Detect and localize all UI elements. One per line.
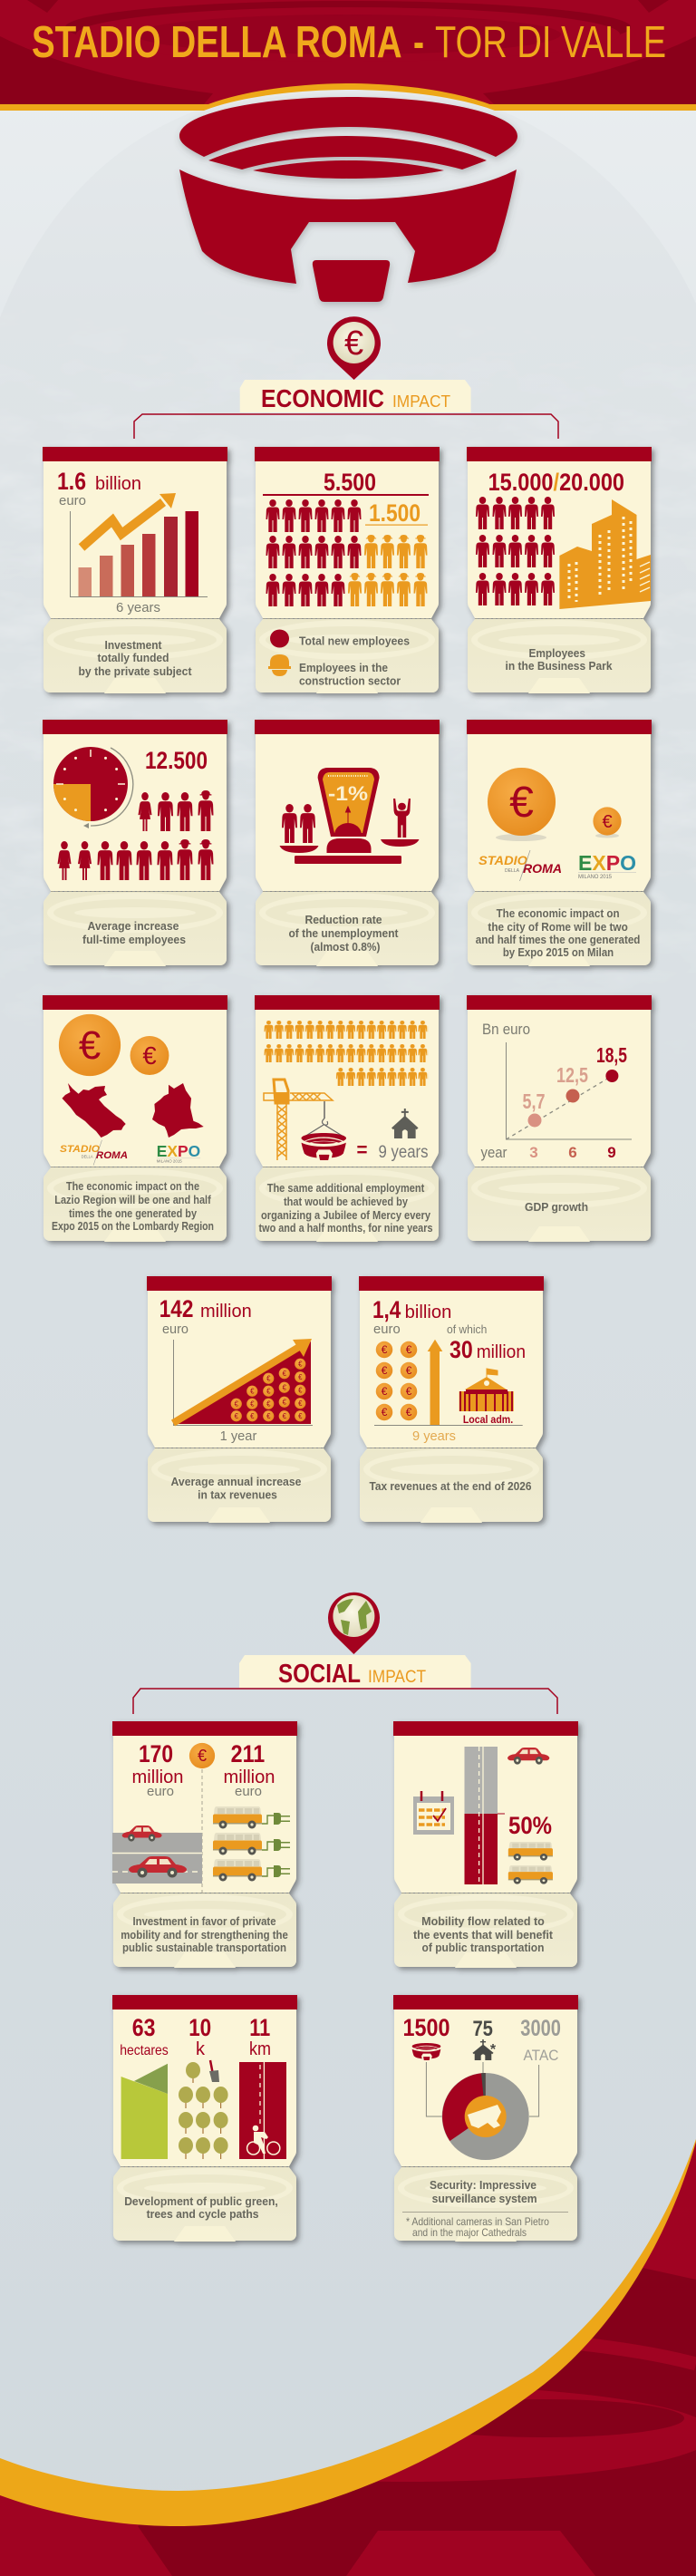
caption: by the private subject [78,664,192,678]
icon: office buildings [559,499,651,609]
panel: mobility flow [393,1721,578,1968]
bar chart: six years [71,493,208,596]
panel: mobility investment: euro [147,1785,174,1799]
chart: surveillance donut [442,2073,529,2160]
caption: (almost 0.8%) [310,940,381,954]
panel: tax revenue 2026 [359,1276,544,1523]
panel: mobility investment: million [132,1767,183,1787]
caption: that would be achieved by [284,1195,409,1208]
panel: green, trees, cycle paths: 10 [188,2014,211,2041]
caption: times the one generated by [69,1206,198,1220]
panel: security [393,1995,578,2242]
panel: tax revenue 2026: Local adm. [463,1413,513,1426]
panel: business park [467,447,652,693]
caption [476,906,640,959]
chart: GDP growth: 9 [607,1144,616,1161]
panel: investment: 6 years [116,601,160,615]
panel: annual tax revenue: 142 [160,1295,193,1322]
icon: coins [488,768,622,841]
caption: The same additional employment [267,1181,425,1195]
caption: surveillance system [432,2192,537,2205]
icon: stadium [179,97,517,302]
heading: social impact: IMPACT [368,1668,426,1687]
panel: green, trees, cycle paths: k [196,2039,206,2059]
caption: totally funded [98,651,169,664]
panel: tax revenue 2026: 30 [450,1336,473,1363]
panel: green, trees, cycle paths: 63 [132,2014,155,2041]
panel: tax revenue 2026: euro [373,1322,401,1337]
panel: new employees: 5.500 [324,469,376,496]
chart: GDP growth [480,1021,632,1161]
map: Lombardy [152,1083,204,1138]
panel: jubilee employment: 9 years [379,1143,428,1162]
panel: security: ATAC [524,2047,558,2064]
header band [0,0,696,111]
panel: jubilee employment [255,995,440,1242]
caption: Average increase [87,919,179,933]
panel: new employees [255,447,440,693]
icon: buses [508,1842,553,1884]
panel: investment: euro [59,494,86,508]
panel: annual tax revenue: euro [162,1322,188,1337]
caption: Employees [528,646,585,660]
icon: globe pin [328,1593,380,1654]
people: total employees [266,499,361,606]
caption [259,1181,433,1235]
chart: GDP growth: 5,7 [522,1089,546,1113]
panel: annual tax revenue: 1 year [220,1429,257,1444]
logo: Stadio della Roma [60,1140,128,1166]
caption: Tax revenues at the end of 2026 [370,1479,531,1493]
panel: mobility investment: million [223,1767,276,1787]
icon: euro pin: € [344,324,363,363]
logo: Expo Milano 2015 [157,1142,200,1164]
panel: tax revenue 2026: million [477,1342,526,1362]
caption: by Expo 2015 on Milan [503,945,614,959]
caption: Expo 2015 on the Lombardy Region [52,1219,214,1233]
caption: full-time employees [82,933,186,946]
heading: economic impact [240,380,471,412]
icon: crane lifting stadium [264,1080,346,1160]
heading: social impact: SOCIAL [278,1660,361,1689]
faint city texture [0,272,696,1088]
illustration: road and cars [112,1825,202,1884]
icon: town hall [459,1369,514,1411]
caption: in tax revenues [198,1488,277,1502]
illustration: public green [121,2064,168,2159]
panel: GDP growth [467,995,652,1242]
caption: two and a half months, for nine years [259,1221,433,1235]
people: construction workers [348,535,428,606]
panel: mobility flow: 50% [508,1812,552,1839]
illustration: road split [464,1747,505,1884]
bracket: social [133,1689,557,1714]
panel: impact on Rome vs Milan [467,720,652,966]
logo: Stadio della Roma [478,850,562,881]
caption [52,1179,214,1233]
icon: calendar [413,1791,454,1835]
panel: mobility investment: 211 [231,1740,265,1767]
panel: investment [43,447,227,693]
caption: Average annual increase [170,1475,301,1488]
panel: full-time employees [43,720,227,966]
chart: rising revenue [173,1339,313,1425]
people: orange crowd [265,1021,429,1086]
panel: tax revenue 2026: billion [405,1303,451,1322]
chart: GDP growth: year [480,1144,508,1161]
caption [413,1914,554,1954]
caption [121,1914,288,1954]
chart: GDP growth: 6 [568,1144,577,1161]
logo: Expo Milano 2015 [578,851,636,880]
icon: stadium [412,2043,440,2060]
icon: church [392,1109,419,1138]
caption: Lazio Region will be one and half [54,1193,211,1206]
caption: mobility and for strengthening the [121,1928,288,1942]
panel: green, trees, cycle paths: 11 [249,2014,270,2041]
caption: The economic impact on the [66,1179,199,1193]
bracket: economic [134,414,558,439]
icon: scale [279,768,419,864]
chart: GDP growth: Bn euro [482,1021,530,1038]
caption: the events that will benefit [413,1928,554,1942]
panel: unemployment [255,720,440,966]
illustration: cycle path [239,2062,286,2159]
caption: Mobility flow related to [421,1914,545,1928]
people: business park employees [476,497,555,605]
caption: trees and cycle paths [147,2207,259,2221]
panel: mobility investment: euro [235,1785,262,1799]
caption: Investment in favor of private [132,1914,276,1928]
panel: investment: 1.6 [57,468,86,495]
caption: Reduction rate [304,913,382,926]
caption [402,2178,568,2239]
chart: GDP growth: 12,5 [556,1063,588,1087]
background arch [0,92,696,1360]
panel: mobility investment [112,1721,297,1968]
caption: of the unemployment [288,926,399,940]
legend [268,629,410,687]
heading: economic impact: ECONOMIC [261,384,384,412]
panel: green, trees, cycle paths: hectares [120,2043,169,2058]
panel: security: 75 [472,2017,493,2041]
icon: church: * [490,2042,497,2058]
caption: Development of public green, [124,2194,278,2208]
icon: coin stacks [376,1341,417,1420]
panel: business park: 15.000/20.000 [488,469,624,496]
caption: and in the major Cathedrals [412,2226,527,2239]
icon: car [508,1748,549,1765]
heading: social impact [239,1655,471,1689]
title: STADIO DELLA ROMA [32,18,402,67]
people: full-time employees [58,790,214,880]
icon: clock [53,747,133,828]
panel: green, trees, cycle paths [112,1995,297,2242]
icon: euro pin [327,316,381,380]
title: - [413,18,424,67]
caption: the city of Rome will be two [488,920,628,934]
icon: scale: -1% [328,782,368,805]
caption [82,919,186,946]
caption [288,913,399,954]
panel: tax revenue 2026: 9 years [412,1429,456,1444]
panel: jubilee employment: = [357,1138,368,1161]
panel: new employees: 1.500 [369,499,420,527]
caption: GDP growth [525,1200,588,1214]
legend: Total new employees [299,634,410,647]
panel: mobility investment: 170 [139,1740,173,1767]
caption [506,646,613,673]
caption: The economic impact on [497,906,620,920]
panel: tax revenue 2026: of which [447,1322,487,1336]
legend: Employees in the [299,661,388,674]
panel: annual tax revenue [147,1276,332,1523]
caption: in the Business Park [506,659,613,673]
panel: impact on Lazio vs Lombardy [43,995,227,1242]
caption: Investment [105,638,162,652]
caption: of public transportation [422,1941,545,1954]
illustration: trees [179,2060,228,2159]
caption: organizing a Jubilee of Mercy every [261,1208,431,1222]
panel: annual tax revenue: million [200,1302,252,1322]
caption [170,1475,301,1502]
chart: GDP growth: 3 [529,1144,538,1161]
panel: security: 3000 [520,2016,561,2041]
chart: GDP growth: 18,5 [596,1043,627,1067]
icon: church [472,2039,497,2060]
map: Lazio [62,1083,126,1138]
caption: and half times the one generated [476,933,640,946]
panel: security: 1500 [402,2014,450,2041]
caption: * Additional cameras in San Pietro [406,2215,549,2228]
illustration: electric buses [213,1806,290,1882]
caption [124,2194,278,2221]
icon: coins [59,1014,169,1076]
panel: tax revenue 2026: 1,4 [372,1296,401,1323]
caption [78,638,192,678]
caption: Security: Impressive [430,2178,536,2192]
legend: construction sector [299,674,401,687]
arrow: up [428,1340,442,1425]
panel: green, trees, cycle paths: km [249,2039,271,2059]
panel: investment: billion [95,474,141,494]
heading: economic impact: IMPACT [392,392,450,411]
caption: public sustainable transportation [122,1941,286,1954]
panel: full-time employees: 12.500 [145,747,208,774]
